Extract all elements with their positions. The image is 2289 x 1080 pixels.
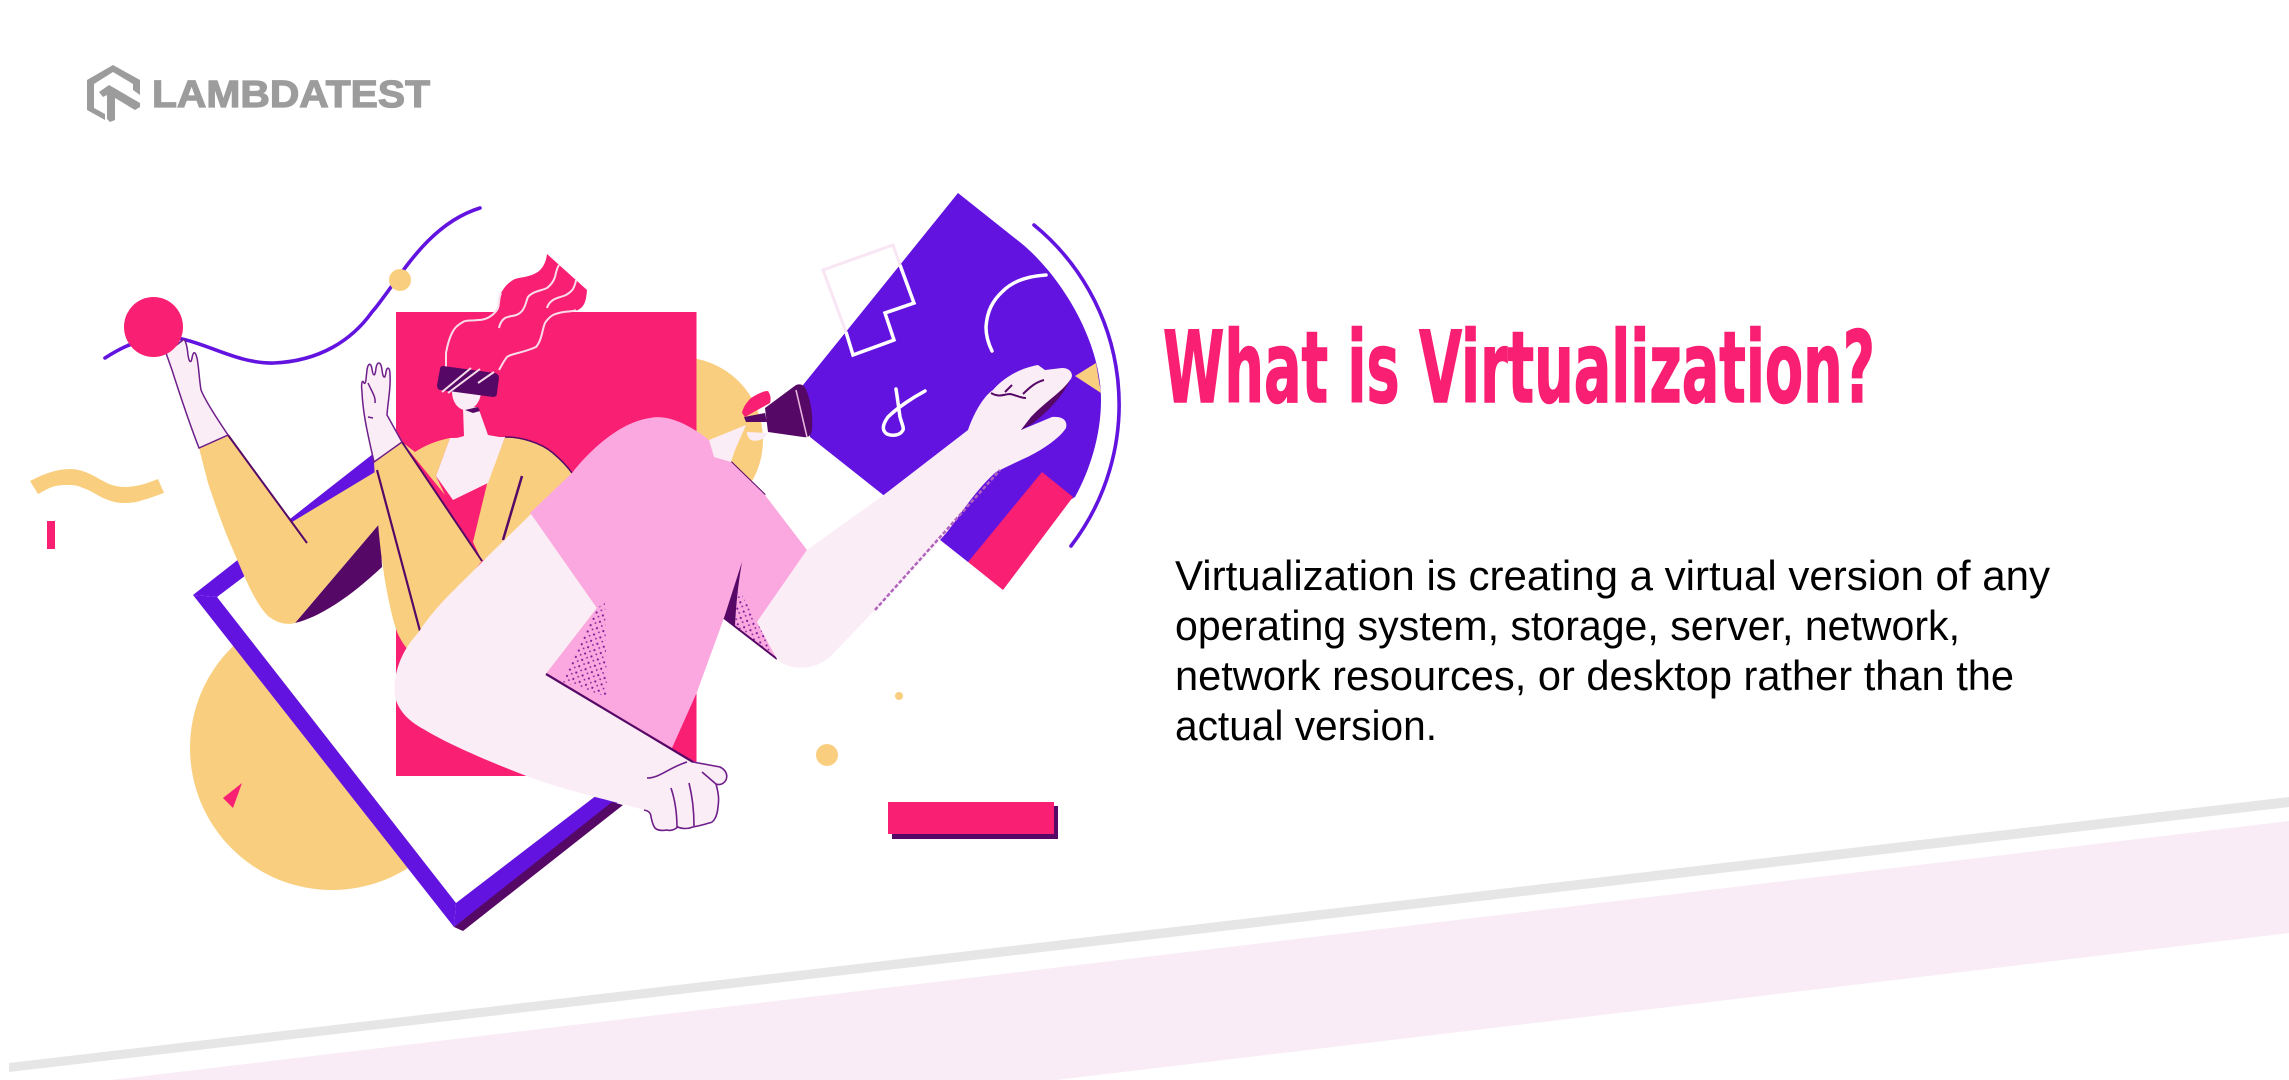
hair shape (446, 254, 587, 370)
white loop on fan (883, 389, 925, 435)
sleeve stipple (563, 603, 607, 697)
outer purple arc (1034, 225, 1119, 546)
line 1: Virtualization is creating a virtual version of any (1175, 552, 2050, 599)
logo wordmark: LAMBDATEST (152, 74, 430, 116)
red square (396, 312, 696, 776)
body text (1175, 552, 2050, 749)
white frame interior (217, 430, 696, 903)
resting hand outline (644, 762, 727, 830)
finger creases (991, 380, 1044, 398)
yellow triangle on fan (1075, 363, 1101, 393)
large yellow circle (190, 606, 474, 890)
jacket back panel (402, 438, 450, 495)
white zigzag on fan (846, 265, 914, 355)
elbow shadow (295, 523, 382, 623)
chin piece (747, 432, 768, 441)
person red hair (742, 391, 771, 417)
logo: LambdaTest (87, 65, 430, 122)
collar (709, 425, 746, 464)
jacket crease (503, 476, 522, 540)
reaching arm and hand (757, 365, 1072, 668)
line 2: operating system, storage, server, network, (1175, 602, 1960, 649)
pink t-shirt (530, 417, 807, 748)
hair strand lower (499, 310, 576, 370)
yellow circle behind square (597, 357, 763, 523)
gray diagonal stripe (9, 797, 2289, 1072)
bar (888, 802, 1054, 834)
raised arm two (362, 363, 482, 650)
headset glare (442, 368, 494, 393)
projector glare line (796, 390, 807, 437)
decorative yellow squiggle (30, 469, 164, 503)
small red bar (47, 521, 55, 549)
line 4: actual version. (1175, 702, 1437, 749)
hand details (368, 383, 375, 418)
neck (450, 407, 505, 440)
armpit crease (724, 618, 777, 659)
purple light beam fan (803, 193, 1101, 562)
yellow dot small (895, 692, 903, 700)
red ball (124, 297, 183, 357)
headset body (437, 366, 499, 397)
illustration: virtual reality figures (30, 193, 1119, 931)
jacket right panel (473, 437, 572, 561)
small red triangle (223, 783, 242, 808)
forearm and hand (166, 340, 228, 448)
yellow sleeve two (374, 442, 482, 650)
purple wave line (105, 208, 480, 363)
VR headset (437, 366, 499, 397)
collar and chest (436, 437, 505, 500)
pale outline square (823, 245, 900, 332)
yellow dot large (816, 744, 838, 766)
figure: woman with VR headset (124, 254, 587, 650)
line 3: network resources, or desktop rather than the (1175, 652, 2014, 699)
neck shadow (465, 407, 480, 413)
projector (765, 384, 812, 437)
pale pink diagonal band (111, 821, 2289, 1080)
frame shadow (454, 802, 623, 931)
finger shadow (1021, 380, 1070, 430)
resting arm crease (546, 674, 693, 762)
raised arm reaching red ball (166, 340, 382, 624)
sleeve crease (228, 435, 307, 543)
figure: person in pink shirt (394, 365, 1072, 830)
icon: logo hexagon arrow (87, 65, 140, 122)
sleeve line (377, 470, 420, 631)
sleeve edge (402, 442, 482, 561)
hair (446, 254, 587, 370)
forearm and hand two (362, 363, 402, 462)
hair strand left (446, 293, 501, 367)
armpit shadow (724, 562, 742, 626)
forearm texture (875, 470, 1000, 610)
yellow sleeve (199, 435, 382, 624)
projector handle (744, 413, 767, 422)
hair strand right (547, 280, 576, 308)
chin (452, 391, 481, 410)
jacket shoulder outline (505, 437, 572, 473)
resting arm and hand (394, 514, 727, 830)
red block on fan (968, 472, 1073, 590)
chest dark edge (731, 462, 765, 495)
white arc on fan (986, 275, 1046, 351)
hair strand middle (499, 265, 559, 328)
bar shadow (892, 806, 1058, 839)
purple tilted frame (193, 450, 650, 927)
red bar with shadow (888, 802, 1058, 839)
armpit stipple (735, 586, 777, 659)
yellow dot on wave (389, 269, 411, 291)
